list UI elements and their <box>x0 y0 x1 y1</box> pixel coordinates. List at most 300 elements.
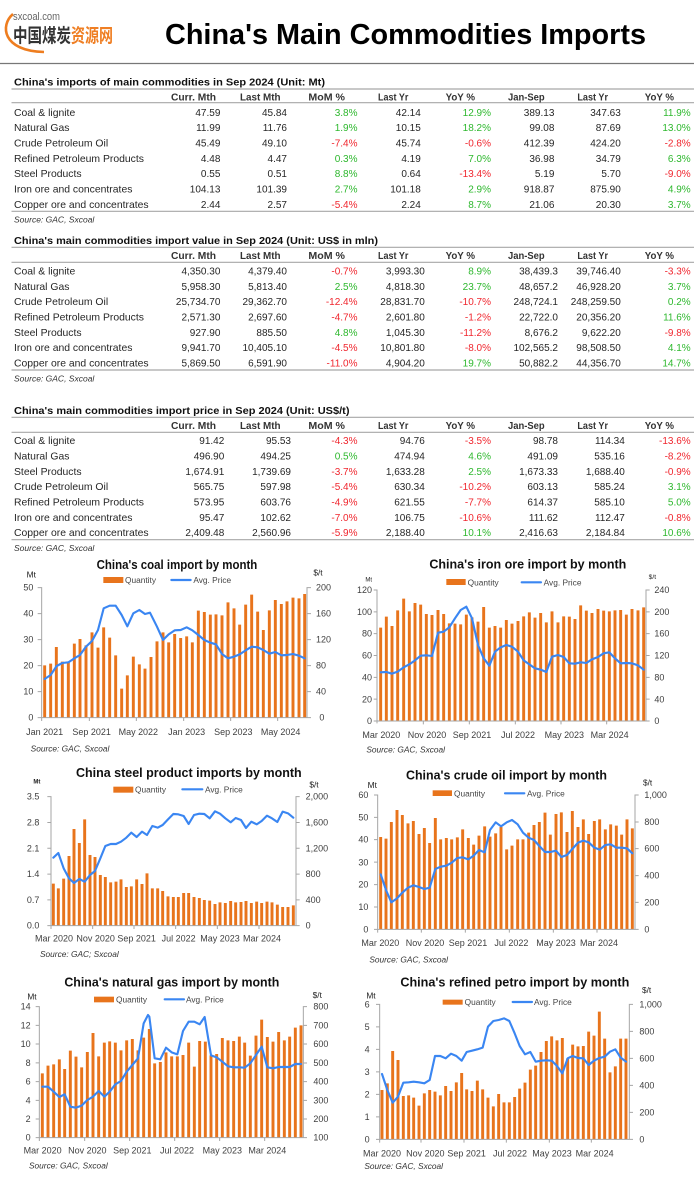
row: natural gas: Natural Gas <box>14 123 69 134</box>
axes and labels: 120 <box>357 585 372 595</box>
axes and labels: 40 <box>654 694 664 704</box>
axes and labels: Mt <box>368 780 378 790</box>
axes and labels: Mar 2020 <box>362 730 400 740</box>
row: crude: 29,362.70 <box>242 297 287 308</box>
row: natural gas: 474.94 <box>394 452 425 462</box>
row: iron ore: 104.13 <box>190 184 221 196</box>
legend: Avg. Price <box>193 575 232 585</box>
axes and labels: 80 <box>316 661 326 671</box>
axes and labels: 600 <box>639 1053 654 1063</box>
row: natural gas: 48,657.2 <box>519 282 558 293</box>
row: coal: 8.9% <box>468 266 491 278</box>
row: copper: Copper ore and concentrates <box>14 200 149 211</box>
source note: Source: GAC, Sxcoal <box>369 954 449 964</box>
legend: Avg. Price <box>544 577 582 587</box>
row: steel <box>14 467 691 478</box>
axes and labels: Mt <box>27 569 37 579</box>
table header: value: Last Yr <box>577 251 608 262</box>
source note: Source: GAC, Sxcoal <box>14 373 95 383</box>
chart: coal import by month <box>23 557 331 754</box>
axes and labels: $/t <box>313 567 323 577</box>
row: iron ore: 101.39 <box>256 184 287 196</box>
row: steel: 4.8% <box>335 328 358 339</box>
row: copper: 14.7% <box>662 358 691 370</box>
row: natural gas: 18.2% <box>463 123 491 134</box>
legend: Avg. Price <box>205 785 243 795</box>
row: crude: 0.2% <box>668 297 691 308</box>
row: natural gas: 3.7% <box>668 282 691 293</box>
axes and labels: 4 <box>365 1044 370 1054</box>
axes and labels: 1.4 <box>27 869 39 879</box>
row: coal: 47.59 <box>195 108 221 119</box>
table header: value: Jan-Sep <box>508 251 545 262</box>
row: steel: 8.8% <box>335 169 358 180</box>
row: crude: 28,831.70 <box>380 297 425 308</box>
axes and labels: May 2023 <box>545 730 584 740</box>
row: coal: 94.76 <box>400 436 425 447</box>
row: iron ore: 918.87 <box>524 184 555 196</box>
axes and labels: 200 <box>316 583 331 593</box>
axes and labels: 400 <box>306 895 321 905</box>
row: coal: 38,439.3 <box>519 266 558 278</box>
logo: sxcoal <box>6 11 113 52</box>
row: copper: 50,882.2 <box>519 358 558 370</box>
row: refined <box>14 312 691 324</box>
bars: quantity <box>382 1012 626 1139</box>
row: refined: 6.3% <box>668 154 691 165</box>
row: crude <box>14 138 691 150</box>
row: steel: -3.7% <box>331 467 358 478</box>
axes and labels: 0 <box>365 1134 370 1144</box>
row: iron ore: 102,565.2 <box>514 343 558 354</box>
row: copper: 2.24 <box>401 200 421 211</box>
row: coal: -3.5% <box>465 436 491 447</box>
row: copper: 2.57 <box>268 200 287 211</box>
row: refined: 573.95 <box>194 498 225 508</box>
row: crude: 45.74 <box>396 138 421 150</box>
axes and labels: Mt <box>27 992 37 1002</box>
row: natural gas: 0.5% <box>335 452 358 462</box>
legend: Avg. Price <box>186 994 224 1004</box>
row: coal: 389.13 <box>524 108 555 119</box>
row: steel: 885.50 <box>256 328 287 339</box>
axes and labels: 20 <box>362 694 372 704</box>
axes and labels: Jul 2022 <box>494 938 528 948</box>
bars: quantity <box>53 819 293 926</box>
row: steel: 5.70 <box>601 169 621 180</box>
row: crude: 424.20 <box>590 138 621 150</box>
row: iron ore: 4.9% <box>668 184 691 196</box>
row: coal: 95.53 <box>266 436 291 447</box>
row: coal <box>14 436 691 447</box>
legend: Quantity <box>454 788 486 798</box>
axes and labels: 20 <box>358 880 368 890</box>
row: coal: Coal & lignite <box>14 266 75 278</box>
row: refined: 4.48 <box>201 154 221 165</box>
row: iron ore <box>14 513 691 524</box>
axes and labels: 160 <box>654 629 669 639</box>
axes and labels: 1,200 <box>306 843 328 853</box>
row: iron ore: 112.47 <box>595 513 625 524</box>
row: iron ore <box>14 343 691 354</box>
axes and labels: 200 <box>654 607 669 617</box>
axes and labels: Mar 2024 <box>243 933 281 943</box>
row: coal: 98.78 <box>533 436 558 447</box>
axes and labels: Sep 2023 <box>214 727 253 737</box>
row: natural gas <box>14 452 691 462</box>
table header: price: MoM % <box>308 421 345 432</box>
row: crude: 603.13 <box>527 482 558 493</box>
axes and labels: 6 <box>26 1077 31 1087</box>
axes and labels: 400 <box>313 1077 328 1087</box>
axes and labels: Mar 2024 <box>580 938 618 948</box>
legend: Quantity <box>116 994 148 1004</box>
axes and labels: May 2023 <box>203 1146 242 1156</box>
row: iron ore: 111.62 <box>529 513 558 524</box>
row: refined: 0.3% <box>335 154 358 165</box>
row: iron ore <box>14 184 691 196</box>
chart title: China's refined petro import by month <box>400 975 629 990</box>
row: crude: -0.6% <box>465 138 491 150</box>
table title: value: China's main commodities import value in Sep 2024 (Unit: US$ in mln) <box>14 235 378 247</box>
row: copper <box>14 358 691 370</box>
axes and labels: 200 <box>644 897 659 907</box>
row: copper: 4,904.20 <box>386 358 425 370</box>
row: refined: 2,601.80 <box>386 312 425 324</box>
row: coal: 3.8% <box>335 108 358 119</box>
row: crude: -5.4% <box>331 482 358 493</box>
axes and labels: 2 <box>365 1089 370 1099</box>
axes and labels: Mar 2020 <box>361 938 399 948</box>
row: refined: -4.7% <box>331 312 358 324</box>
axes and labels: Jan 2023 <box>168 727 205 737</box>
axes and labels: 800 <box>313 1002 328 1012</box>
row: steel: 1,739.69 <box>252 467 291 478</box>
row: crude: 49.10 <box>262 138 287 150</box>
row: crude: Crude Petroleum Oil <box>14 138 108 150</box>
axes and labels: 400 <box>639 1080 654 1090</box>
axes and labels: 40 <box>362 672 372 682</box>
row: crude: 25,734.70 <box>176 297 221 308</box>
axes and labels: Nov 2020 <box>68 1146 107 1156</box>
row: refined: 20,356.20 <box>576 312 621 324</box>
axes and labels: Mar 2024 <box>248 1146 286 1156</box>
row: steel: 0.64 <box>401 169 421 180</box>
axes and labels: 40 <box>358 835 368 845</box>
row: iron ore: 10,405.10 <box>242 343 287 354</box>
row: coal: 11.9% <box>663 108 691 119</box>
source note: Source: GAC, Sxcoal <box>366 744 446 754</box>
axes and labels: 6 <box>365 999 370 1009</box>
row: iron ore: Iron ore and concentrates <box>14 184 132 196</box>
row: refined: -4.9% <box>331 498 358 508</box>
axes and labels: 0.0 <box>27 921 39 931</box>
row: steel: Steel Products <box>14 328 82 339</box>
row: natural gas: 87.69 <box>596 123 621 134</box>
table header: quantity: Last Mth <box>240 92 280 104</box>
row: copper: 10.6% <box>662 528 691 539</box>
row: crude: -7.4% <box>331 138 358 150</box>
axes and labels: Sep 2021 <box>449 938 487 948</box>
row: copper: 6,591.90 <box>248 358 287 370</box>
axes and labels: Jul 2022 <box>160 1146 194 1156</box>
row: coal: 3,993.30 <box>386 266 425 278</box>
table header: price: YoY % <box>645 421 674 432</box>
row: coal: 4,379.40 <box>248 266 287 278</box>
row: copper: 2,416.63 <box>519 528 558 539</box>
row: copper <box>14 528 691 539</box>
axes and labels <box>23 567 331 737</box>
axes and labels: Mt <box>33 780 40 786</box>
table header: price <box>171 421 674 432</box>
table header: price: Curr. Mth <box>171 421 216 432</box>
axes and labels: 800 <box>306 869 321 879</box>
axes and labels: Sep 2021 <box>72 727 111 737</box>
axes and labels: 120 <box>654 651 669 661</box>
row: natural gas: 535.16 <box>594 452 625 462</box>
row: coal: 39,746.40 <box>576 266 621 278</box>
table header: price: Last Mth <box>240 421 280 432</box>
axes and labels <box>21 990 328 1156</box>
table title: price: China's main commodities import price in Sep 2024 (Unit: US$/t) <box>14 405 350 417</box>
axes and labels: 2.8 <box>27 817 39 827</box>
row: coal: -0.7% <box>331 266 358 278</box>
table header: price: YoY % <box>446 421 475 432</box>
axes and labels: 800 <box>639 1026 654 1036</box>
source note: Source: GAC, Sxcoal <box>364 1161 444 1171</box>
source note: Source: GAC, Sxcoal <box>14 214 95 224</box>
axes and labels: 20 <box>23 661 33 671</box>
axes and labels: 2,000 <box>306 792 328 802</box>
axes and labels: 200 <box>639 1107 654 1117</box>
axes and labels: 10 <box>358 902 368 912</box>
row: iron ore: 95.47 <box>199 513 225 524</box>
axes and labels: 160 <box>316 609 331 619</box>
axes and labels: Nov 2020 <box>76 933 115 943</box>
row: refined: -7.7% <box>465 498 491 508</box>
row: iron ore: 875.90 <box>590 184 621 196</box>
axes and labels: 500 <box>313 1058 328 1068</box>
row: steel: 5.19 <box>535 169 555 180</box>
axes and labels: 30 <box>23 635 33 645</box>
legend <box>433 788 565 798</box>
row: iron ore: 10,801.80 <box>380 343 425 354</box>
axes and labels: 0 <box>639 1134 644 1144</box>
axes and labels: $/t <box>649 574 656 581</box>
row: crude: Crude Petroleum Oil <box>14 482 108 493</box>
table header: quantity: Last Yr <box>577 92 608 104</box>
axes and labels <box>363 985 662 1158</box>
table header: quantity: Last Yr <box>378 92 408 104</box>
row: steel: -13.4% <box>459 169 491 180</box>
row: coal: -4.3% <box>331 436 358 447</box>
source note: Source: GAC, Sxcoal <box>31 744 111 754</box>
row: iron ore: Iron ore and concentrates <box>14 343 132 354</box>
axes and labels: May 2022 <box>119 727 158 737</box>
row: crude: 597.98 <box>260 482 291 493</box>
legend: Avg. Price <box>534 997 572 1007</box>
row: natural gas: Natural Gas <box>14 452 69 462</box>
axes and labels: 30 <box>358 857 368 867</box>
row: crude: 565.75 <box>194 482 225 493</box>
row: iron ore: -4.5% <box>331 343 358 354</box>
legend <box>446 577 582 587</box>
row: refined: 5.0% <box>668 498 691 508</box>
axes and labels: 2.1 <box>27 843 39 853</box>
row: copper: 19.7% <box>463 358 491 370</box>
row: steel: 0.55 <box>201 169 221 180</box>
row: natural gas: 491.09 <box>527 452 558 462</box>
row: refined: 7.0% <box>468 154 491 165</box>
row: refined: Refined Petroleum Products <box>14 312 144 324</box>
axes and labels: 10 <box>23 687 33 697</box>
chart: natural gas import by month <box>21 974 328 1171</box>
logo: sxcoal: sxcoal.com <box>13 11 60 23</box>
axes and labels: 5 <box>365 1022 370 1032</box>
axes and labels: 50 <box>23 583 33 593</box>
row: iron ore: -8.0% <box>465 343 491 354</box>
legend: Quantity <box>465 997 497 1007</box>
table: import value <box>12 235 694 383</box>
row: coal: -13.6% <box>659 436 691 447</box>
axes and labels: 1,600 <box>306 817 328 827</box>
chart: refined petro import by month <box>363 975 662 1171</box>
axes and labels: Sep 2021 <box>453 730 491 740</box>
axes and labels: $/t <box>313 990 323 1000</box>
row: steel: -11.2% <box>460 328 491 339</box>
row: copper <box>14 200 691 211</box>
axes and labels: Mar 2024 <box>576 1148 614 1158</box>
axes and labels: $/t <box>309 779 319 789</box>
table header: price: Jan-Sep <box>508 421 545 432</box>
table header: price: Last Yr <box>378 421 408 432</box>
row: refined: Refined Petroleum Products <box>14 154 144 165</box>
axes and labels: 80 <box>654 672 664 682</box>
bars: quantity <box>381 810 632 929</box>
row: crude: 248,724.1 <box>514 297 558 308</box>
row: coal: 42.14 <box>396 108 421 119</box>
legend: Quantity <box>125 575 157 585</box>
chart title: China steel product imports by month <box>76 765 302 780</box>
source note: Source: GAC, Sxcoal <box>29 1161 109 1171</box>
line: average price <box>381 607 644 674</box>
row: natural gas: 11.99 <box>196 123 221 134</box>
row: crude: -12.4% <box>326 297 358 308</box>
row: coal: 4,350.30 <box>181 266 221 278</box>
row: copper: 5,869.50 <box>181 358 221 370</box>
axes and labels: Jul 2022 <box>162 933 196 943</box>
axes and labels: 60 <box>358 790 368 800</box>
row: coal: 114.34 <box>595 436 625 447</box>
row: steel: Steel Products <box>14 169 82 180</box>
bars: quantity <box>45 594 305 718</box>
axes and labels: 240 <box>654 585 669 595</box>
chart title: China's coal import by month <box>97 557 257 572</box>
axes and labels: Mar 2020 <box>363 1148 401 1158</box>
axes and labels: 1 <box>365 1112 370 1122</box>
row: crude: 585.24 <box>594 482 625 493</box>
axes and labels: May 2024 <box>261 727 300 737</box>
line: average price <box>382 1018 626 1103</box>
row: iron ore: 101.18 <box>390 184 421 196</box>
axes and labels: 0 <box>363 924 368 934</box>
row: iron ore: 2.9% <box>468 184 491 196</box>
axes and labels: 8 <box>26 1058 31 1068</box>
row: iron ore: -0.8% <box>665 513 691 524</box>
row: steel: 2.5% <box>468 467 491 478</box>
row: natural gas <box>14 282 691 293</box>
table header: quantity: Curr. Mth <box>171 92 216 104</box>
row: natural gas <box>14 123 691 134</box>
row: copper: 10.1% <box>463 528 491 539</box>
row: copper: Copper ore and concentrates <box>14 358 149 370</box>
row: steel: 927.90 <box>190 328 221 339</box>
row: refined: 4.19 <box>401 154 421 165</box>
row: iron ore: 102.62 <box>260 513 291 524</box>
axes and labels: 200 <box>313 1114 328 1124</box>
row: coal: Coal & lignite <box>14 108 75 119</box>
table header: value: Last Mth <box>240 251 280 262</box>
row: steel <box>14 328 691 339</box>
axes and labels: 2 <box>26 1114 31 1124</box>
row: steel <box>14 169 691 180</box>
axes and labels: 3 <box>365 1067 370 1077</box>
row: copper: 21.06 <box>529 200 555 211</box>
axes and labels: May 2023 <box>200 933 240 943</box>
row: natural gas: -8.2% <box>665 452 691 462</box>
line: average price <box>45 606 305 679</box>
row: natural gas: 5,958.30 <box>181 282 221 293</box>
axes and labels: $/t <box>642 985 652 995</box>
axes and labels: 120 <box>316 635 331 645</box>
table header: value: Last Yr <box>378 251 408 262</box>
row: natural gas: 1.9% <box>335 123 358 134</box>
row: copper: 2,409.48 <box>185 528 225 539</box>
line: average price <box>53 811 293 883</box>
chart title: China's crude oil import by month <box>406 767 607 782</box>
legend <box>103 575 232 585</box>
chart title: China's natural gas import by month <box>64 974 279 989</box>
row: crude: 248,259.50 <box>571 297 621 308</box>
legend: Quantity <box>135 785 167 795</box>
row: natural gas: 4,818.30 <box>386 282 425 293</box>
axes and labels: Sep 2021 <box>117 933 156 943</box>
row: coal: -3.3% <box>665 266 691 278</box>
row: refined: 34.79 <box>596 154 621 165</box>
row: iron ore: -7.0% <box>331 513 358 524</box>
axes and labels: Nov 2020 <box>406 938 444 948</box>
row: copper: 3.7% <box>668 200 691 211</box>
row: copper: 44,356.70 <box>576 358 621 370</box>
axes and labels: Mt <box>366 991 376 1001</box>
row: copper: Copper ore and concentrates <box>14 528 149 539</box>
row: refined <box>14 154 691 165</box>
table header: value: YoY % <box>446 251 475 262</box>
row: refined <box>14 498 691 508</box>
bars: quantity <box>42 1020 301 1138</box>
row: steel: 1,673.33 <box>519 467 558 478</box>
row: iron ore: 4.1% <box>668 343 691 354</box>
row: crude: 412.39 <box>524 138 555 150</box>
axes and labels: 0.7 <box>27 895 39 905</box>
row: coal: 91.42 <box>199 436 225 447</box>
axes and labels: Mar 2024 <box>591 730 629 740</box>
row: copper: 2,184.84 <box>586 528 625 539</box>
table header: quantity <box>171 92 674 104</box>
axes and labels <box>27 779 328 943</box>
row: steel: 8,676.2 <box>525 328 558 339</box>
row: crude: -10.2% <box>459 482 491 493</box>
